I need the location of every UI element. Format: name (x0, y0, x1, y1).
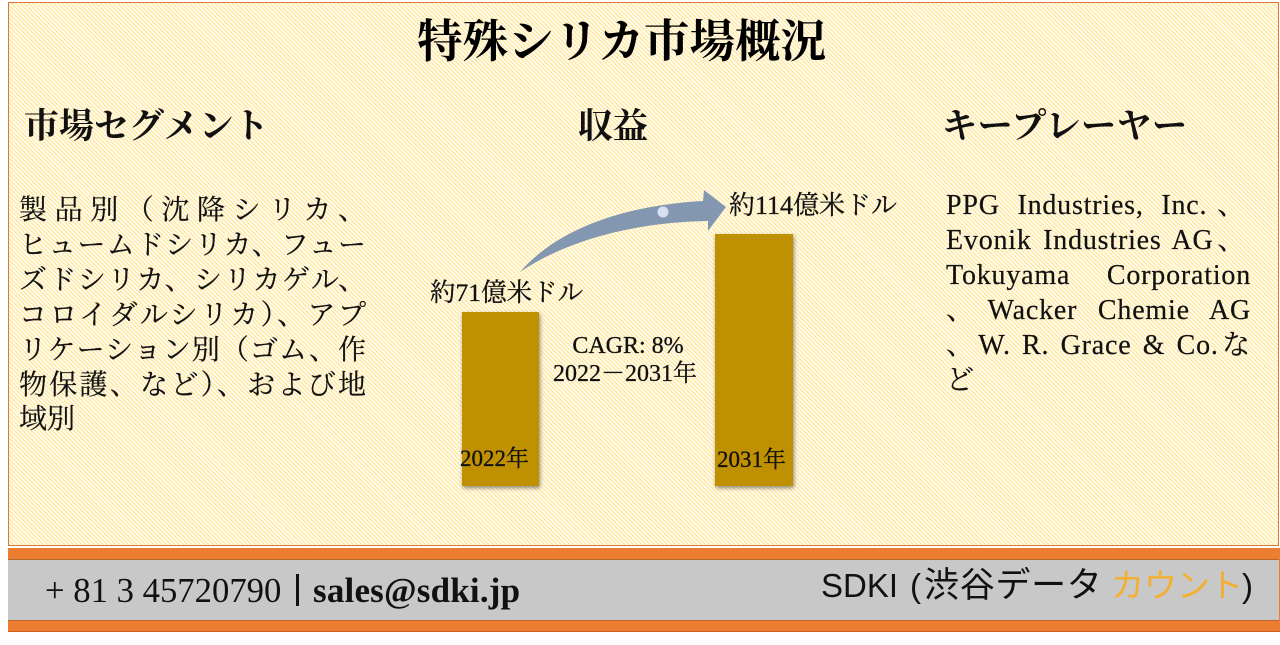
label: CAGR: 2022－2031年 (553, 361, 697, 387)
text block: key players: 、W. R. Grace & Co.な (946, 330, 1251, 361)
title: 特殊シリカ市場概況 (417, 16, 826, 67)
label: 2031 year: 2031年 (717, 447, 786, 472)
footer bar (8, 548, 1280, 632)
text block: segments: ズドシリカ、シリカゲル、 (19, 265, 366, 296)
text block: key players: PPG Industries, Inc.、 (946, 190, 1246, 221)
bar: 2031 (715, 234, 793, 486)
icon: growth arrow (520, 190, 726, 272)
footer contact: sales@sdki.jp (313, 571, 520, 610)
text block: key players: ど (946, 365, 974, 396)
heading: revenue: 収益 (578, 107, 648, 146)
label: CAGR (553, 333, 697, 387)
footer brand (821, 566, 1253, 605)
text block: key players: Evonik Industries AG、 (946, 225, 1246, 256)
footer brand: SDKI (821, 567, 898, 604)
text block: segments: コロイダルシリカ）、アプ (19, 300, 366, 331)
bar: 2022 (462, 312, 539, 486)
footer brand: ) (1242, 567, 1253, 604)
footer brand: ( (910, 567, 921, 604)
label: 2022 year: 2022年 (460, 446, 529, 471)
text block: key players: Tokuyama Corporation (946, 260, 1251, 291)
text block: segments: 製品別（沈降シリカ、 (19, 195, 366, 226)
label: 2031 value: 約114億米ドル (729, 191, 897, 220)
text block: segments: 域別 (19, 404, 75, 435)
text block: segments: リケーション別（ゴム、作 (19, 335, 366, 366)
footer brand: カウント (1111, 567, 1243, 604)
text block: segments: ヒュームドシリカ、フュー (19, 230, 366, 261)
footer grey strip (8, 559, 1279, 621)
text block: key players: 、Wacker Chemie AG (946, 295, 1251, 326)
footer contact: + 81 3 45720790 (45, 571, 281, 610)
text block: segments (19, 195, 366, 435)
text block: segments: 物保護、など）、および地 (19, 370, 366, 401)
label: 2022 value: 約71億米ドル (430, 278, 583, 307)
footer contact (45, 571, 520, 610)
text block: key players (946, 190, 1251, 396)
footer brand: 渋谷データ (924, 566, 1103, 605)
heading: key players: キープレーヤー (942, 107, 1187, 146)
heading: market segments: 市場セグメント (24, 107, 269, 146)
label: CAGR: CAGR: 8% (572, 333, 684, 359)
